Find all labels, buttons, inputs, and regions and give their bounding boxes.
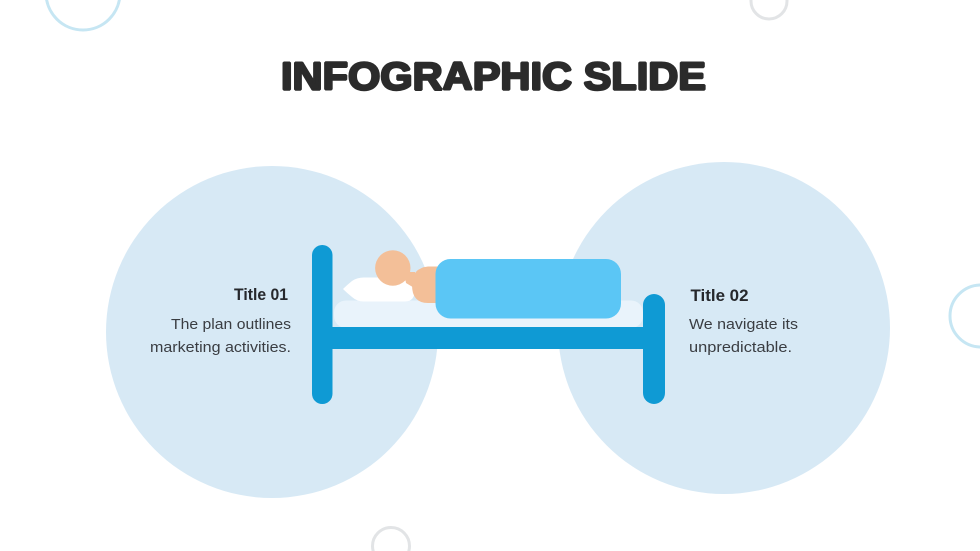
body: title 02: [689, 317, 798, 356]
decorative ring: top left: [46, 0, 120, 30]
panel: right circle: [558, 162, 890, 494]
illustration: patient in bed: [312, 245, 665, 404]
body: title 02: We navigate its: [689, 317, 798, 333]
title: INFOGRAPHIC SLIDE: [281, 56, 706, 98]
footboard post: [643, 294, 665, 404]
panel: left circle: [106, 166, 438, 498]
blanket: [436, 259, 621, 318]
mattress: [334, 300, 643, 328]
text block: title 02: [689, 287, 798, 356]
decorative ring: right edge: [950, 285, 980, 347]
bed rail: [325, 327, 650, 349]
pillow: [343, 278, 415, 302]
heading: title 02: Title 02: [690, 287, 748, 305]
heading: title 01: Title 01: [234, 286, 288, 304]
decorative ring: bottom: [372, 528, 410, 551]
body: title 02: unpredictable.: [689, 340, 792, 356]
head and neck: [375, 250, 440, 303]
decorative ring: top right: [751, 0, 787, 19]
shoulder: [412, 266, 440, 303]
headboard post: [312, 245, 332, 404]
body: title 01: [150, 317, 291, 356]
body: title 01: marketing activities.: [150, 340, 291, 356]
text block: title 01: [150, 286, 291, 356]
body: title 01: The plan outlines: [171, 317, 291, 333]
